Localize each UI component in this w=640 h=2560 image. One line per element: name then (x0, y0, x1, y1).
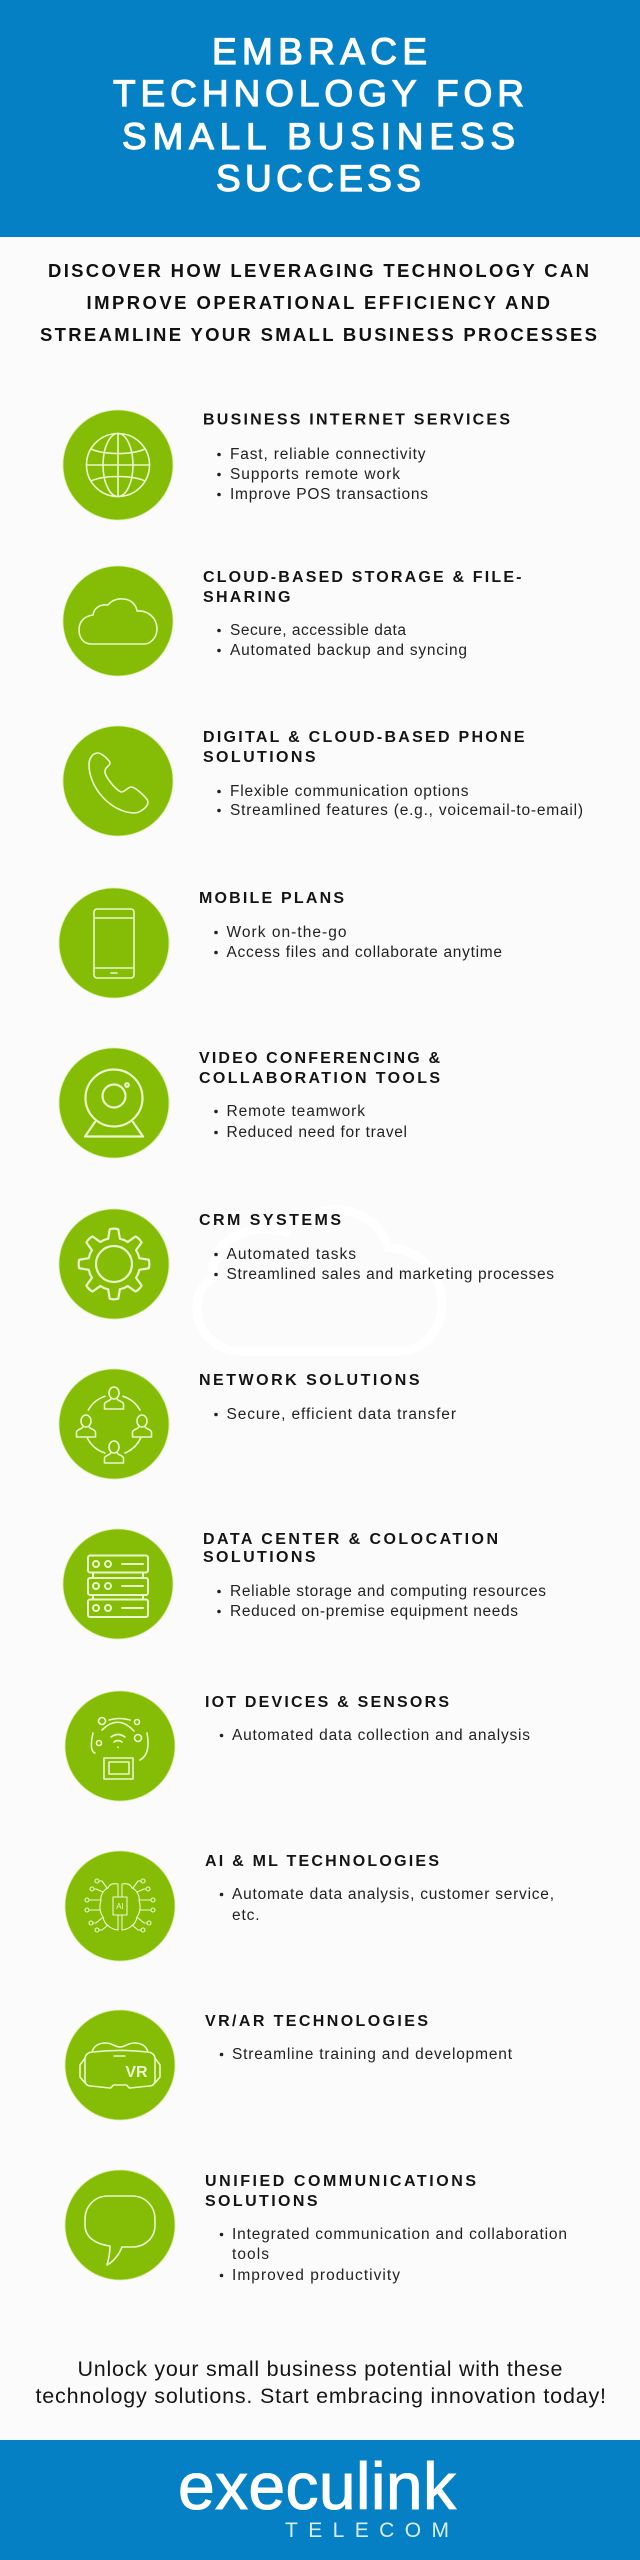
logo: execulink telecom: execulink (178, 2449, 457, 2523)
bullet list: Reduced on-premise equipment needs (230, 1603, 518, 1620)
heading: UNIFIED COMMUNICATIONS (205, 2173, 476, 2190)
bullet list: Automated data collection and analysis (232, 1727, 530, 1744)
icon: VR headset (65, 2010, 175, 2120)
panel: VR/AR technologies (65, 2010, 513, 2120)
heading (205, 2173, 476, 2210)
bullet list: Access files and collaborate anytime (226, 944, 502, 961)
heading: VIDEO CONFERENCING & (199, 1050, 440, 1067)
heading: DATA CENTER & COLOCATION (203, 1531, 498, 1548)
panel: unified communications (65, 2170, 567, 2284)
panel: mobile plans (59, 888, 502, 998)
panel: AI and ML (65, 1851, 554, 1961)
icon: server rack (63, 1529, 173, 1639)
closing message (36, 2357, 606, 2408)
bullet list (214, 924, 502, 961)
panel: video conferencing (59, 1048, 440, 1158)
bullet list: Secure, efficient data transfer (226, 1406, 456, 1423)
heading: BUSINESS INTERNET SERVICES (203, 412, 510, 428)
icon: globe (63, 410, 173, 520)
icon: mobile phone (59, 888, 169, 998)
closing message: technology solutions. Start embracing innovation today! (36, 2384, 606, 2408)
panel: business internet services (63, 410, 510, 520)
panel: IoT devices (65, 1691, 530, 1801)
heading (203, 729, 525, 766)
bullet list: Automated tasks (226, 1246, 356, 1263)
icon: speech bubble (65, 2170, 175, 2280)
bullet list: Reliable storage and computing resources (230, 1583, 546, 1600)
title: TECHNOLOGY FOR (113, 73, 524, 114)
heading: SOLUTIONS (203, 749, 316, 766)
bullet list (217, 783, 583, 819)
panel: phone solutions (63, 726, 583, 836)
icon: VR headset: VR (125, 2064, 148, 2081)
title: SMALL BUSINESS (122, 116, 515, 157)
heading: SOLUTIONS (205, 2193, 318, 2210)
footer band (0, 2440, 640, 2560)
bullet list: Fast, reliable connectivity (230, 446, 426, 463)
heading (203, 569, 522, 606)
panel: CRM systems (59, 1209, 554, 1319)
heading: SHARING (203, 589, 290, 606)
panel: network solutions (59, 1369, 456, 1479)
heading: MOBILE PLANS (199, 890, 344, 907)
icon: AI brain (65, 1851, 175, 1961)
heading (203, 1531, 498, 1566)
subtitle: STREAMLINE YOUR SMALL BUSINESS PROCESSES (40, 324, 597, 345)
title: EMBRACE (212, 31, 427, 72)
bullet list: etc. (232, 1907, 260, 1924)
heading: COLLABORATION TOOLS (199, 1070, 440, 1087)
icon: webcam (59, 1048, 169, 1158)
title (113, 31, 524, 199)
heading: SOLUTIONS (203, 1549, 316, 1566)
bullet list: Flexible communication options (230, 783, 469, 800)
bullet list: Improve POS transactions (230, 486, 428, 503)
bullet list: Secure, accessible data (230, 622, 406, 639)
bullet list: Streamlined sales and marketing processes (226, 1266, 554, 1283)
heading: VR/AR TECHNOLOGIES (205, 2013, 428, 2030)
heading (199, 1050, 440, 1087)
panel: data center (63, 1529, 546, 1639)
closing message: Unlock your small business potential with these (78, 2357, 562, 2381)
subtitle: IMPROVE OPERATIONAL EFFICIENCY AND (86, 292, 550, 313)
decorative faint cloud outline (197, 1210, 442, 1351)
bullet list: Supports remote work (230, 466, 400, 483)
icon: IoT device with wifi (65, 1691, 175, 1801)
heading: CRM SYSTEMS (199, 1212, 341, 1229)
heading: DIGITAL & CLOUD-BASED PHONE (203, 729, 525, 746)
icon: gear (59, 1209, 169, 1319)
panel: cloud-based storage (63, 566, 522, 676)
icon: people network (59, 1369, 169, 1479)
icon: phone (63, 726, 173, 836)
heading: NETWORK SOLUTIONS (199, 1372, 420, 1389)
bullet list (220, 1886, 554, 1924)
icon: AI brain: AI (116, 1902, 124, 1911)
bullet list (217, 1583, 546, 1620)
bullet list: Streamlined features (e.g., voicemail-to-email) (230, 802, 583, 819)
heading: IOT DEVICES & SENSORS (205, 1694, 449, 1711)
bullet list (217, 446, 428, 503)
bullet list: Remote teamwork (226, 1103, 365, 1120)
title: SUCCESS (216, 158, 421, 199)
subtitle (40, 260, 597, 345)
subtitle: DISCOVER HOW LEVERAGING TECHNOLOGY CAN (48, 260, 589, 281)
bullet list: Improved productivity (232, 2267, 400, 2284)
icon: cloud (63, 566, 173, 676)
heading: AI & ML TECHNOLOGIES (205, 1853, 439, 1870)
bullet list: Streamline training and development (232, 2046, 513, 2063)
bullet list: Reduced need for travel (226, 1124, 407, 1141)
header band (0, 0, 640, 237)
bullet list (217, 622, 467, 659)
bullet list: Work on-the-go (226, 924, 346, 941)
bullet list (214, 1103, 407, 1141)
bullet list (220, 2226, 567, 2284)
bullet list: tools (232, 2246, 269, 2263)
bullet list (214, 1246, 554, 1283)
bullet list: Integrated communication and collaboration (232, 2226, 567, 2243)
bullet list: Automate data analysis, customer service, (232, 1886, 554, 1903)
bullet list: Automated backup and syncing (230, 642, 467, 659)
heading: CLOUD-BASED STORAGE & FILE- (203, 569, 522, 586)
logo: execulink telecom: TELECOM (285, 2519, 449, 2542)
